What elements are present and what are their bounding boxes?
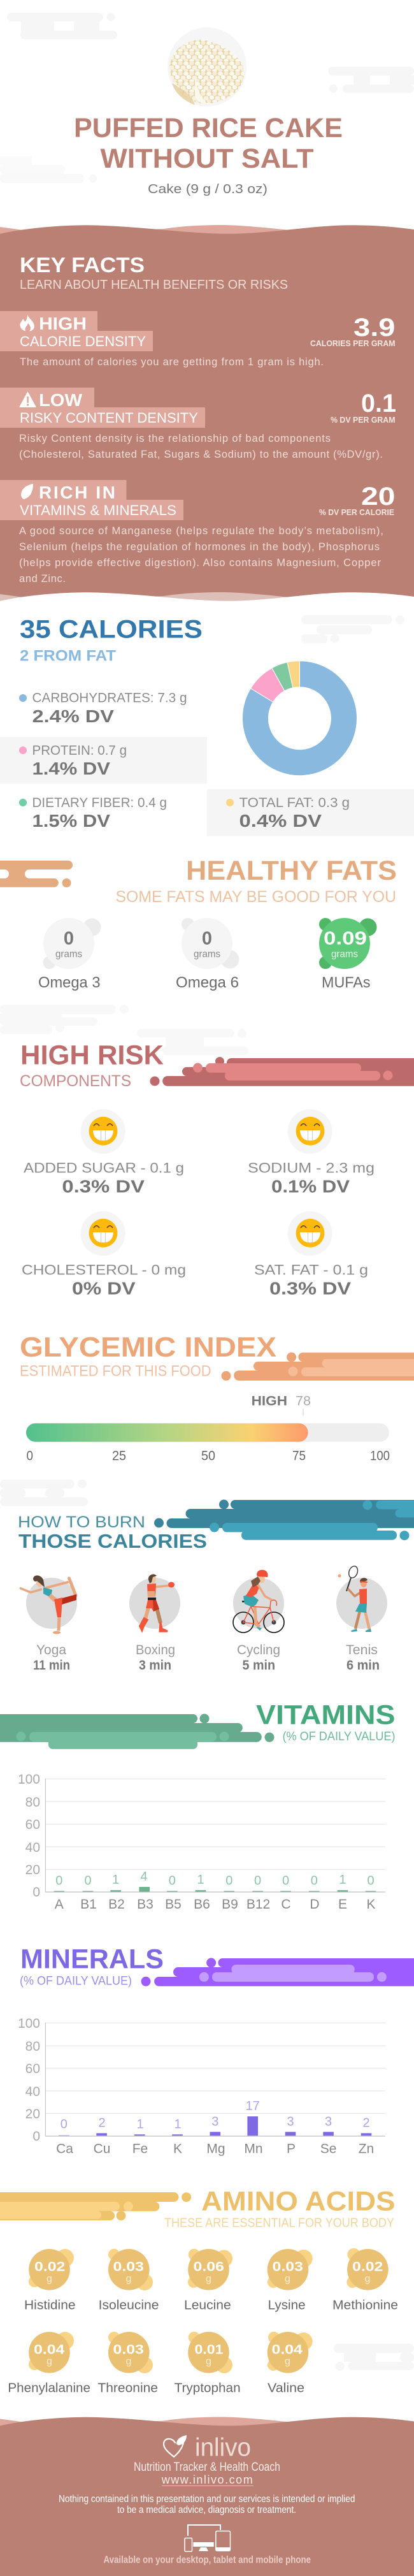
title: PUFFED RICE CAKE xyxy=(74,113,343,143)
legend: dietary fiber: 1.5% DV xyxy=(32,811,110,831)
fact: rich in vitamins and minerals: 20 xyxy=(361,483,395,511)
bar chart: minerals: 20 xyxy=(25,2107,40,2121)
legend: protein xyxy=(0,737,207,783)
label: boxing: Boxing xyxy=(136,1643,175,1657)
amino: phenylalanine: Phenylalanine xyxy=(8,2382,90,2396)
amino: methionine xyxy=(332,2248,398,2313)
bar chart: vitamins: B2 xyxy=(108,1897,125,1912)
title: WITHOUT SALT xyxy=(101,143,313,174)
bar chart: vitamins: K xyxy=(366,1897,376,1912)
bar chart: vitamins: 0 xyxy=(55,1874,62,1888)
gauge scale: 25 xyxy=(112,1449,126,1464)
gauge bar xyxy=(26,1423,389,1442)
amino: valine xyxy=(268,2332,313,2396)
amino: lysine: g xyxy=(285,2273,290,2284)
amino: phenylalanine: 0.04 xyxy=(34,2342,64,2357)
amino: histidine: 0.02 xyxy=(34,2259,65,2274)
fact: rich in vitamins and minerals: (helps provide effective digestion). Also contains Magnesium, Copper xyxy=(19,557,381,569)
legend: carbohydrates: CARBOHYDRATES: 7.3 g xyxy=(32,691,187,706)
background cloud: burn xyxy=(0,1480,88,1506)
amino: histidine: Histidine xyxy=(24,2299,76,2313)
heading: minerals: MINERALS xyxy=(20,1944,164,1974)
omega 6: 0 xyxy=(202,929,212,949)
value: cycling: 5 min xyxy=(242,1658,275,1673)
heading: amino acids: AMINO ACIDS xyxy=(201,2187,395,2217)
bar chart: vitamins: 40 xyxy=(25,1840,40,1855)
amino: histidine: g xyxy=(46,2273,52,2284)
value: boxing: 3 min xyxy=(139,1658,171,1673)
bar chart: vitamins: 80 xyxy=(25,1795,40,1810)
component: saturated fat: 0.3% DV xyxy=(269,1279,351,1299)
bar chart: vitamins: 20 xyxy=(25,1863,40,1877)
amino: threonine: g xyxy=(126,2356,131,2367)
food photo: puffed rice cake xyxy=(168,27,246,106)
bar chart: minerals: Zn xyxy=(359,2141,374,2156)
component: saturated fat: SAT. FAT - 0.1 g xyxy=(254,1262,368,1277)
amino: methionine: 0.02 xyxy=(352,2259,383,2274)
bar chart: vitamins: 1 xyxy=(112,1873,119,1887)
exercise: boxing xyxy=(129,1575,180,1673)
heading: high risk: HIGH RISK xyxy=(20,1040,164,1070)
bar chart: minerals: 100 xyxy=(18,2016,40,2031)
amino: threonine: 0.03 xyxy=(113,2342,144,2357)
label: tennis: Tenis xyxy=(346,1643,378,1657)
component: sodium xyxy=(248,1109,375,1197)
background clouds: high risk xyxy=(0,1005,248,1055)
bar chart: minerals: K xyxy=(173,2141,182,2156)
fact: low risky content density: Risky Content density is the relationship of bad components xyxy=(19,433,331,444)
heading: those calories: THOSE CALORIES xyxy=(18,1530,207,1552)
fact: high calorie density: 3.9 xyxy=(353,314,395,342)
fact: high calorie density xyxy=(0,311,395,368)
component: sodium: 0.1% DV xyxy=(271,1177,350,1197)
fact: high calorie density: The amount of calories you are getting from 1 gram is high. xyxy=(20,356,324,368)
MUFAs: grams xyxy=(331,949,358,960)
panel: amino acids xyxy=(0,2187,398,2396)
legend: carbohydrates: 2.4% DV xyxy=(32,706,114,726)
panel: footer xyxy=(0,2417,414,2576)
bar chart: vitamins: 4 xyxy=(140,1870,148,1884)
legend: total fat: TOTAL FAT: 0.3 g xyxy=(239,796,350,810)
value: tennis: 6 min xyxy=(346,1658,380,1673)
fact: rich in vitamins and minerals: Selenium (helps the regulation of hormones in the body), Phosphorus xyxy=(19,541,380,553)
amino: leucine: 0.06 xyxy=(194,2259,224,2274)
legend: protein: 1.4% DV xyxy=(32,759,110,778)
bottom wave xyxy=(0,592,414,612)
tagline: Nutrition Tracker & Health Coach xyxy=(134,2461,280,2474)
MUFAs: 0.09 xyxy=(324,929,367,949)
amino: tryptophan xyxy=(175,2332,241,2396)
bar chart: vitamins: 0 xyxy=(225,1874,232,1888)
fact: high calorie density: CALORIES PER GRAM xyxy=(310,338,395,348)
amino: lysine: 0.03 xyxy=(273,2259,303,2274)
bar chart: minerals: 0 xyxy=(61,2118,68,2132)
gauge scale: 0 xyxy=(27,1449,33,1464)
panel: vitamins xyxy=(0,1699,395,1912)
subheading: amino acids: THESE ARE ESSENTIAL FOR YOUR BODY xyxy=(164,2216,394,2230)
bar chart: vitamins: 1 xyxy=(339,1873,346,1887)
bar chart: minerals: 1 xyxy=(174,2117,182,2131)
icon: devices xyxy=(185,2525,231,2551)
component: cholesterol: CHOLESTEROL - 0 mg xyxy=(22,1262,186,1277)
logo wordmark: inlivo xyxy=(195,2434,251,2462)
heading: how to burn: HOW TO BURN xyxy=(18,1513,145,1531)
heading: healthy fats: HEALTHY FATS xyxy=(186,855,397,886)
bar chart: vitamins xyxy=(18,1772,385,1912)
component: cholesterol xyxy=(22,1211,186,1299)
component: cholesterol: 0% DV xyxy=(72,1279,136,1299)
bar chart: minerals: 80 xyxy=(25,2039,40,2054)
gauge label xyxy=(252,1394,311,1416)
bar chart: vitamins: B6 xyxy=(194,1897,210,1912)
decoration: orange bars xyxy=(222,1353,414,1381)
gauge label: 78 xyxy=(296,1394,311,1408)
bar chart: vitamins: 1 xyxy=(197,1873,204,1887)
subheading: minerals: (% OF DAILY VALUE) xyxy=(20,1974,132,1988)
panel: key facts xyxy=(0,225,414,612)
fact: rich in vitamins and minerals: % DV PER CALORIE xyxy=(319,507,394,517)
amino: leucine xyxy=(184,2249,232,2313)
bar chart: minerals: 2 xyxy=(362,2116,370,2130)
panel: glycemic index xyxy=(20,1332,414,1464)
bar chart: vitamins: B9 xyxy=(222,1897,238,1912)
amino: tryptophan: g xyxy=(206,2356,211,2367)
bar chart: minerals: Se xyxy=(320,2141,336,2156)
fact: rich in vitamins and minerals: A good source of Manganese (helps regulate the body’s metabolism), xyxy=(19,525,383,537)
bar chart: vitamins: C xyxy=(281,1897,291,1912)
legend: dietary fiber xyxy=(19,796,167,831)
disclaimer: Nothing contained in this presentation and our services is intended or implied xyxy=(59,2494,355,2505)
panel: minerals xyxy=(18,1944,414,2156)
bar chart: vitamins: 0 xyxy=(254,1874,261,1888)
logo: heart and leaf xyxy=(164,2435,187,2457)
bar chart: vitamins: B1 xyxy=(80,1897,97,1912)
bar chart: minerals: 60 xyxy=(25,2062,40,2076)
bar chart: vitamins: D xyxy=(310,1897,320,1912)
bar chart: vitamins: 0 xyxy=(282,1874,289,1888)
bar chart: minerals: P xyxy=(287,2141,296,2156)
amino: lysine: Lysine xyxy=(268,2299,306,2313)
amino: tryptophan: 0.01 xyxy=(195,2342,224,2357)
disclaimer: to be a medical advice, diagnosis or treatment. xyxy=(117,2505,296,2515)
icon: flame xyxy=(20,315,34,331)
title xyxy=(74,113,343,174)
heading: calories: 35 CALORIES xyxy=(20,616,203,644)
amino: methionine: Methionine xyxy=(332,2299,398,2313)
legend: total fat xyxy=(207,789,414,836)
exercise: tennis xyxy=(336,1565,387,1673)
omega 3: Omega 3 xyxy=(38,974,101,991)
subheading: vitamins: (% OF DAILY VALUE) xyxy=(283,1729,395,1743)
bar chart: vitamins: 100 xyxy=(18,1772,40,1787)
amino: valine: Valine xyxy=(268,2382,304,2396)
bar chart: minerals: 3 xyxy=(287,2114,294,2128)
amino: valine: g xyxy=(285,2356,290,2367)
heading: glycemic index: GLYCEMIC INDEX xyxy=(20,1332,276,1363)
decoration: red bars xyxy=(150,1057,414,1086)
gauge label: HIGH xyxy=(252,1394,287,1408)
decoration: yellow bars xyxy=(0,2192,191,2220)
fact: rich in vitamins and minerals: RICH IN xyxy=(39,483,115,502)
amino: isoleucine: g xyxy=(126,2273,131,2284)
bar chart: vitamins: A xyxy=(55,1897,64,1912)
MUFAs: MUFAs xyxy=(322,974,371,991)
disclaimer xyxy=(59,2494,355,2515)
amino: lysine xyxy=(268,2249,313,2313)
legend: total fat: 0.4% DV xyxy=(239,811,322,831)
bar chart: vitamins: 0 xyxy=(84,1874,92,1888)
omega 3: 0 xyxy=(64,929,74,949)
amino: methionine: g xyxy=(365,2273,370,2284)
icon: warning triangle xyxy=(19,391,36,407)
bar chart: minerals: 3 xyxy=(211,2114,218,2128)
amino: leucine: g xyxy=(206,2273,211,2284)
bar chart: vitamins: 0 xyxy=(169,1874,176,1888)
bar chart: minerals: Fe xyxy=(132,2141,148,2156)
fact: rich in vitamins and minerals: and Zinc. xyxy=(19,573,66,585)
amino: histidine xyxy=(24,2249,76,2313)
heading: key facts: KEY FACTS xyxy=(20,253,145,277)
amino: threonine: Threonine xyxy=(97,2382,158,2396)
panel: healthy fats xyxy=(0,855,397,991)
gauge scale: 100 xyxy=(370,1449,390,1464)
background clouds: header xyxy=(0,13,414,183)
bar chart: minerals: 3 xyxy=(325,2114,332,2128)
decoration: purple bars xyxy=(141,1958,414,1986)
subheading: from fat: 2 FROM FAT xyxy=(20,648,116,665)
fact: rich in vitamins and minerals xyxy=(0,480,395,585)
fact: rich in vitamins and minerals: VITAMINS & MINERALS xyxy=(20,502,176,518)
fact: high calorie density: CALORIE DENSITY xyxy=(20,333,146,349)
component: added sugar: 0.3% DV xyxy=(62,1177,145,1197)
legend: carbohydrates xyxy=(19,691,187,726)
label: cycling: Cycling xyxy=(237,1643,280,1657)
exercise: yoga xyxy=(20,1575,77,1673)
bar chart: minerals: 17 xyxy=(246,2099,260,2113)
subheading: key facts: LEARN ABOUT HEALTH BENEFITS OR RISKS xyxy=(20,278,288,292)
amino: tryptophan: Tryptophan xyxy=(175,2382,241,2396)
decoration: orange bars xyxy=(0,861,73,887)
bar chart: minerals: 2 xyxy=(98,2116,106,2130)
serving size: Cake (9 g / 0.3 oz) xyxy=(148,182,268,196)
bar chart: minerals xyxy=(18,2016,385,2156)
amino: phenylalanine: g xyxy=(46,2356,52,2367)
fact: low risky content density: (Cholesterol, Saturated Fat, Sugars & Sodium) to the amount (%DV/gr). xyxy=(19,449,383,460)
component: added sugar xyxy=(24,1109,184,1197)
legend: dietary fiber: DIETARY FIBER: 0.4 g xyxy=(32,796,167,810)
component: sodium: SODIUM - 2.3 mg xyxy=(248,1160,375,1175)
amino: phenylalanine xyxy=(8,2332,90,2396)
amino: leucine: Leucine xyxy=(184,2299,231,2313)
background cloud: calories xyxy=(301,615,404,643)
bar chart: vitamins: B3 xyxy=(137,1897,153,1912)
bar chart: vitamins: 0 xyxy=(32,1885,40,1900)
bar chart: minerals: 40 xyxy=(25,2085,40,2099)
bar chart: vitamins: 60 xyxy=(25,1817,40,1832)
bar chart: vitamins: B12 xyxy=(246,1897,270,1912)
fact: high calorie density: HIGH xyxy=(39,314,87,333)
bar chart: minerals: 0 xyxy=(32,2129,40,2144)
component: added sugar: ADDED SUGAR - 0.1 g xyxy=(24,1160,184,1175)
legend: protein: PROTEIN: 0.7 g xyxy=(32,743,127,758)
omega 3: grams xyxy=(55,949,82,960)
amino: isoleucine xyxy=(99,2249,159,2313)
omega 6 xyxy=(176,918,239,991)
background cloud: amino acids xyxy=(334,2344,414,2371)
gauge scale xyxy=(27,1449,390,1464)
label: yoga: Yoga xyxy=(36,1643,66,1657)
bar chart: minerals: 1 xyxy=(136,2117,144,2131)
value: yoga: 11 min xyxy=(33,1658,70,1673)
bar chart: vitamins: 0 xyxy=(311,1874,318,1888)
bar chart: vitamins: B5 xyxy=(165,1897,182,1912)
subheading: glycemic: ESTIMATED FOR THIS FOOD xyxy=(20,1363,211,1380)
bar chart: minerals: Cu xyxy=(94,2141,110,2156)
gauge scale: 75 xyxy=(292,1449,306,1464)
bar chart: minerals: Mg xyxy=(206,2141,225,2156)
panel: how to burn xyxy=(18,1499,414,1673)
exercise: cycling xyxy=(233,1570,284,1673)
gauge scale: 50 xyxy=(201,1449,215,1464)
subheading: components: COMPONENTS xyxy=(20,1072,131,1090)
decoration: teal bars xyxy=(154,1499,414,1540)
bar chart: vitamins: 0 xyxy=(367,1874,375,1888)
donut chart xyxy=(242,661,357,776)
MUFAs xyxy=(319,918,377,991)
amino: threonine xyxy=(97,2332,158,2396)
fact: low risky content density xyxy=(0,388,396,460)
panel: high risk xyxy=(20,1040,414,1299)
fact: low risky content density: 0.1 xyxy=(361,389,396,418)
amino: valine: 0.04 xyxy=(271,2342,303,2357)
fact: low risky content density: LOW xyxy=(39,390,83,410)
availability note: Available on your desktop, tablet and mobile phone xyxy=(103,2555,311,2566)
bar chart: minerals: Ca xyxy=(56,2141,73,2156)
icon: leaf xyxy=(21,484,33,499)
fact: low risky content density: RISKY CONTENT DENSITY xyxy=(20,410,198,426)
bar chart: vitamins: E xyxy=(338,1897,347,1912)
omega 6: grams xyxy=(194,949,220,960)
omega 3 xyxy=(38,918,101,991)
component: saturated fat xyxy=(254,1211,368,1299)
amino: isoleucine: 0.03 xyxy=(113,2259,144,2274)
decoration: green bars xyxy=(0,1714,274,1749)
website: www.inlivo.com xyxy=(161,2473,253,2486)
bar chart: minerals: Mn xyxy=(244,2141,263,2156)
amino: isoleucine: Isoleucine xyxy=(99,2299,159,2313)
subheading: healthy fats: SOME FATS MAY BE GOOD FOR YOU xyxy=(116,888,396,906)
heading: vitamins: VITAMINS xyxy=(256,1699,395,1730)
omega 6: Omega 6 xyxy=(176,974,239,991)
fact: low risky content density: % DV PER GRAM xyxy=(331,415,395,425)
panel: calories xyxy=(0,616,414,836)
